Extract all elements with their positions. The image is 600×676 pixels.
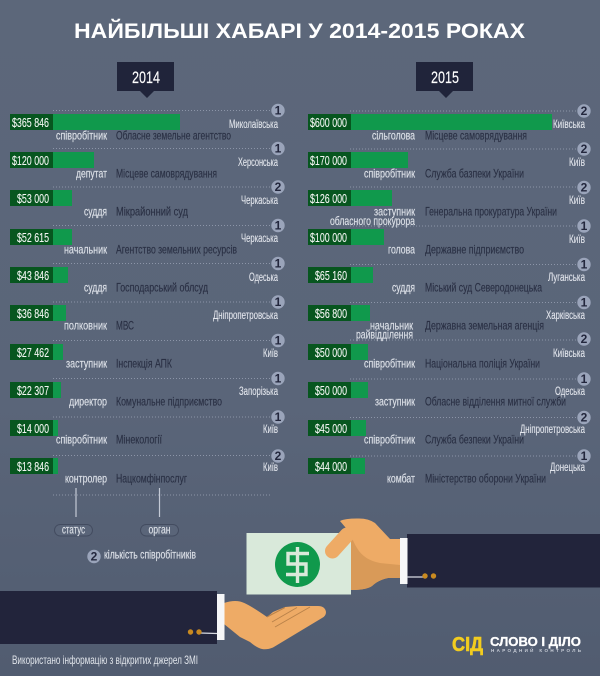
legend: body: орган [148,522,170,536]
row 2015: $170 000: $170 000 [310,153,347,168]
legend: status: статус [62,522,85,536]
row 2014: $365 846: Обласне земельне агентство [116,128,231,142]
row 2014: $365 846: 1 [275,104,282,118]
row 2015: $65 160: Міський суд Северодонецька [425,280,542,294]
row 2015: $50 000 customs [308,372,591,408]
legend: number of employees: кількість співробітників [104,547,196,561]
row 2015: $600 000: сільголова [372,128,415,142]
row 2014: $120 000: $120 000 [12,153,49,168]
row 2015: $56 800: 1 [581,296,588,310]
row 2015: $126 000: Київ [569,195,585,207]
row 2015: $50 000 customs: 1 [581,372,588,386]
row 2015: $65 160: 1 [581,258,588,272]
row 2014: $365 846: Миколаївська [229,119,278,131]
row 2014: $120 000: 1 [275,142,282,156]
illustration: giving hand with banknote [246,518,600,594]
row 2014: $27 462: Київ [263,348,278,360]
row 2014: $13 846: Київ [263,462,278,474]
row 2014: $120 000: депутат [76,166,107,180]
row 2015: $126 000 [308,181,591,228]
row 2014: $53 000: суддя [84,204,107,218]
row 2014: $27 462: $27 462 [17,345,49,360]
row 2014: $27 462 [10,334,285,370]
panel: 2015 bribes [308,104,591,485]
row 2014: $52 615: Агентство земельних ресурсів [116,242,237,256]
logo name: СЛОВО І ДІЛО [490,635,581,649]
row 2015: $170 000: Служба базпеки України [425,166,524,180]
row 2015: $56 800: начальник [370,318,414,332]
row 2015: $50 000 police: Національна поліція України [425,356,540,370]
row 2014: $22 307: Запорізька [239,386,278,398]
row 2014: $53 000: Мікрайонний суд [116,204,188,218]
row 2014: $53 000: 2 [275,180,282,194]
row 2015: $65 160 [308,258,591,294]
row 2014: $365 846: $365 846 [12,115,49,130]
logo tagline: НАРОДНИЙ КОНТРОЛЬ [491,646,582,653]
legend [54,488,196,564]
row 2015: $65 160: $65 160 [315,268,347,283]
row 2015: $600 000: $600 000 [310,115,347,130]
year tag: 2014: 2014 [132,69,160,87]
row 2015: $56 800: $56 800 [315,306,347,321]
row 2014: $14 000 [10,410,285,446]
row 2014: $43 846: 1 [275,257,282,271]
legend: number of employees [87,547,196,564]
row 2015: $100 000: $100 000 [310,230,347,245]
row 2015: $45 000 [308,411,591,446]
row 2015: $45 000: співробітник [364,432,416,446]
row 2015: $600 000: 2 [581,104,588,118]
year tag: 2014 [117,62,174,98]
year tag: 2015 [416,62,473,98]
cuff [400,538,408,584]
row 2015: $100 000: Київ [569,234,585,246]
logo mark: СІД [452,634,483,656]
row 2014: $52 615: Черкаська [241,233,278,245]
row 2014: $52 615: $52 615 [17,230,49,245]
row 2015: $126 000: заступник [374,204,416,218]
row 2015: $100 000: 1 [581,219,588,233]
source note: Використано інформацію з відкритих джерел ЗМІ [12,653,198,667]
row 2014: $13 846: контролер [65,471,107,485]
row 2015: $44 000: $44 000 [315,459,347,474]
row 2014: $13 846: Нацкомфінпослуг [116,471,187,485]
row 2014: $120 000 [10,142,285,180]
row 2015: $50 000 police: $50 000 [315,345,347,360]
row 2015: $170 000: співробітник [364,166,416,180]
row 2015: $100 000: Державне підприємство [425,242,524,256]
row 2015: $44 000 [308,449,591,485]
row 2015: $44 000: Міністерство оборони України [425,471,546,485]
row 2015: $170 000 [308,142,591,180]
row 2014: $22 307 [10,372,285,408]
row 2014: $36 846: полковник [64,318,108,332]
icon: dollar coin [275,542,320,587]
title: НАЙБІЛЬШІ ХАБАРІ У 2014-2015 РОКАХ [74,19,525,43]
finger creases [267,607,310,627]
row 2015: $65 160: Луганська [548,272,585,284]
row 2015: $600 000: Київська [553,119,585,131]
row 2014: $27 462: заступник [66,356,108,370]
row 2014: $43 846: суддя [84,280,107,294]
row 2014: $43 846 [10,257,285,294]
legend: status [54,488,92,536]
row 2014: $53 000: Черкаська [241,195,278,207]
row 2015: $50 000 customs: Одеська [555,386,585,398]
row 2015: $45 000: Служба безпеки України [425,432,524,446]
row 2014: $365 846 [10,104,285,142]
row 2014: $53 000 [10,180,285,218]
row 2014: $13 846: $13 846 [17,459,49,474]
row 2014: $52 615: 1 [275,219,282,233]
row 2015: $65 160: суддя [392,280,415,294]
row 2014: $36 846: МВС [116,318,134,332]
row 2015: $170 000: Київ [569,157,585,169]
row 2014: $120 000: Місцеве самоврядування [116,166,217,180]
row 2014: $52 615: начальник [64,242,108,256]
sleeve [407,534,600,588]
row 2014: $365 846: співробітник [56,128,108,142]
row 2014: $22 307: $22 307 [17,383,49,398]
row 2015: $126 000: 2 [581,181,588,195]
row 2015: $126 000: $126 000 [310,191,347,206]
row 2015: $45 000: 2 [581,411,588,425]
row 2014: $13 846 [10,449,285,485]
row 2015: $100 000: голова [388,242,415,256]
row 2015: $56 800: Державна земельная агенція [425,318,544,332]
open hand [224,601,326,649]
row 2015: $44 000: комбат [387,471,415,485]
row 2015: $600 000 [308,104,591,142]
illustration: receiving hand [0,591,326,649]
row 2015: $56 800 [308,296,591,341]
panel: 2014 bribes [10,104,285,485]
year tag: 2015: 2015 [431,69,459,87]
row 2014: $36 846: Дніпропетровська [213,310,278,322]
row 2014: $14 000: співробітник [56,432,108,446]
row 2014: $27 462: Інспекція АПК [116,356,172,370]
row 2014: $52 615 [10,219,285,256]
row 2015: $56 800: райвідділення [356,327,413,341]
row 2014: $36 846 [10,295,285,332]
row 2014: $22 307: Комунальне підприємство [116,394,222,408]
row 2014: $14 000: Київ [263,424,278,436]
row 2014: $22 307: директор [69,394,107,408]
row 2015: $126 000: обласного прокурора [330,214,415,228]
row 2015: $50 000 police: співробітник [364,356,416,370]
row 2014: $43 846: $43 846 [17,268,49,283]
row 2014: $22 307: 1 [275,372,282,386]
row 2014: $13 846: 2 [275,449,282,463]
logo: Slovo i Dilo [452,634,582,656]
row 2014: $120 000: Херсонська [238,157,278,169]
row 2015: $50 000 customs: $50 000 [315,383,347,398]
row 2014: $14 000: Мінекології [116,432,162,446]
legend: body [140,488,178,536]
cufflinks [407,573,436,579]
legend: number of employees: 2 [91,550,98,564]
row 2015: $50 000 police [308,332,591,370]
row 2014: $14 000: $14 000 [17,421,49,436]
row 2014: $43 846: Одеська [249,272,278,284]
row 2014: $36 846: 1 [275,295,282,309]
row 2015: $600 000: Місцеве самоврядування [425,128,527,142]
row 2015: $50 000 police: 2 [581,332,588,346]
row 2015: $170 000: 2 [581,142,588,156]
row 2015: $50 000 police: Київська [553,348,585,360]
row 2014: $53 000: $53 000 [17,191,49,206]
row 2015: $44 000: Донецька [550,462,585,474]
row 2015: $100 000 [308,219,591,256]
sleeve [0,591,217,644]
banknote [246,533,351,594]
row 2015: $45 000: $45 000 [315,421,347,436]
row 2014: $14 000: 1 [275,410,282,424]
row 2014: $43 846: Господарський облсуд [116,280,208,294]
row 2014: $27 462: 1 [275,334,282,348]
cuff [217,594,224,640]
row 2015: $44 000: 1 [581,449,588,463]
cufflinks [188,629,217,635]
hand palm [340,518,400,590]
row 2015: $50 000 customs: заступник [375,394,416,408]
thumb [332,535,347,551]
row 2014: $36 846: $36 846 [17,306,49,321]
